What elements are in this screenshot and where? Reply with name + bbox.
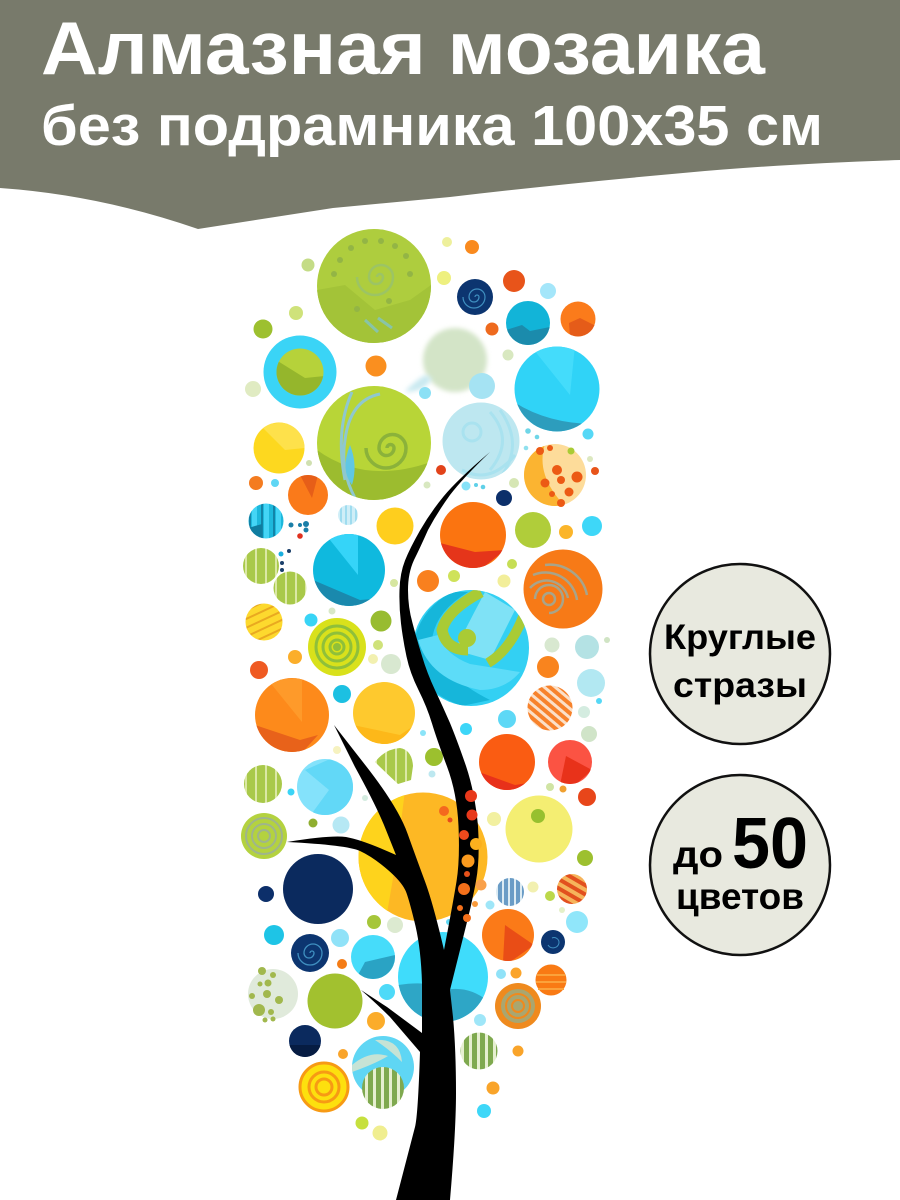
dotted orange circle — [524, 444, 586, 507]
orange facet circle lower — [482, 909, 534, 962]
badge: up to 50 colours — [650, 775, 830, 955]
orange circle top right — [560, 302, 596, 338]
red-orange circle — [479, 734, 535, 792]
red-yellow striped circle — [557, 874, 587, 904]
yellow target circle — [299, 1062, 349, 1112]
badge text line 1: Круглые — [664, 618, 816, 657]
target green circle — [241, 813, 287, 859]
small dots — [245, 237, 610, 1140]
badge: round rhinestones — [650, 564, 830, 744]
green striped circle — [460, 1032, 498, 1070]
badge text: colours: цветов — [676, 876, 804, 917]
badge text: up to: до — [673, 834, 723, 875]
teal circle top right — [506, 301, 550, 346]
tree crown: circles — [241, 229, 610, 1140]
pale ghost circle — [405, 328, 495, 399]
solid green circle — [308, 974, 362, 1028]
tree silhouette — [287, 452, 490, 1200]
big blue circle — [514, 345, 600, 435]
red circle — [548, 740, 592, 785]
navy small circle — [289, 1025, 321, 1057]
orange swirl circle — [524, 550, 602, 628]
orange circle centre — [440, 502, 506, 570]
big green circle with wave — [317, 386, 431, 505]
title: Алмазная мозаика — [41, 6, 766, 90]
navy big circle — [283, 854, 353, 924]
navy circle right — [541, 930, 565, 954]
big blue swirl circle — [413, 590, 529, 706]
yellow-green target circle — [308, 618, 366, 676]
navy spiral circle — [457, 279, 493, 315]
big orange circle — [255, 678, 329, 755]
pale blue swirl circle — [442, 402, 520, 480]
cyan circle lower — [351, 935, 395, 980]
pale yellow circle — [506, 796, 572, 862]
orange striped circle — [536, 964, 566, 996]
teal facet circle — [313, 534, 385, 610]
orange facet circle — [288, 475, 328, 515]
light blue facet circle — [297, 759, 353, 816]
dots on tree branch — [457, 790, 486, 922]
big yellow-orange circle — [358, 790, 488, 925]
badge text line 2: стразы — [673, 666, 807, 705]
orange grey target circle — [495, 983, 541, 1029]
light green stripes fragment — [375, 748, 413, 784]
badge number 50: 50 — [732, 804, 808, 884]
header banner — [0, 0, 900, 229]
blue leaf circle with stripes — [352, 1036, 414, 1109]
subtitle: без подрамника 100х35 см — [41, 94, 823, 158]
big cyan circle behind trunk — [398, 932, 490, 1025]
yellow facet circle — [353, 682, 415, 745]
yellow striped circle — [246, 604, 282, 640]
yellow circle — [254, 420, 305, 474]
pale dotted circle — [248, 967, 298, 1022]
striped teal circle — [248, 504, 284, 540]
striped lime circle — [243, 548, 306, 604]
orange stripes circle — [528, 686, 572, 730]
big green circle with spiral — [317, 229, 431, 345]
navy spiral circle lower — [291, 934, 329, 972]
cyan ring circle — [264, 336, 336, 408]
lime striped circle — [244, 765, 282, 803]
blue striped circle — [496, 878, 524, 906]
